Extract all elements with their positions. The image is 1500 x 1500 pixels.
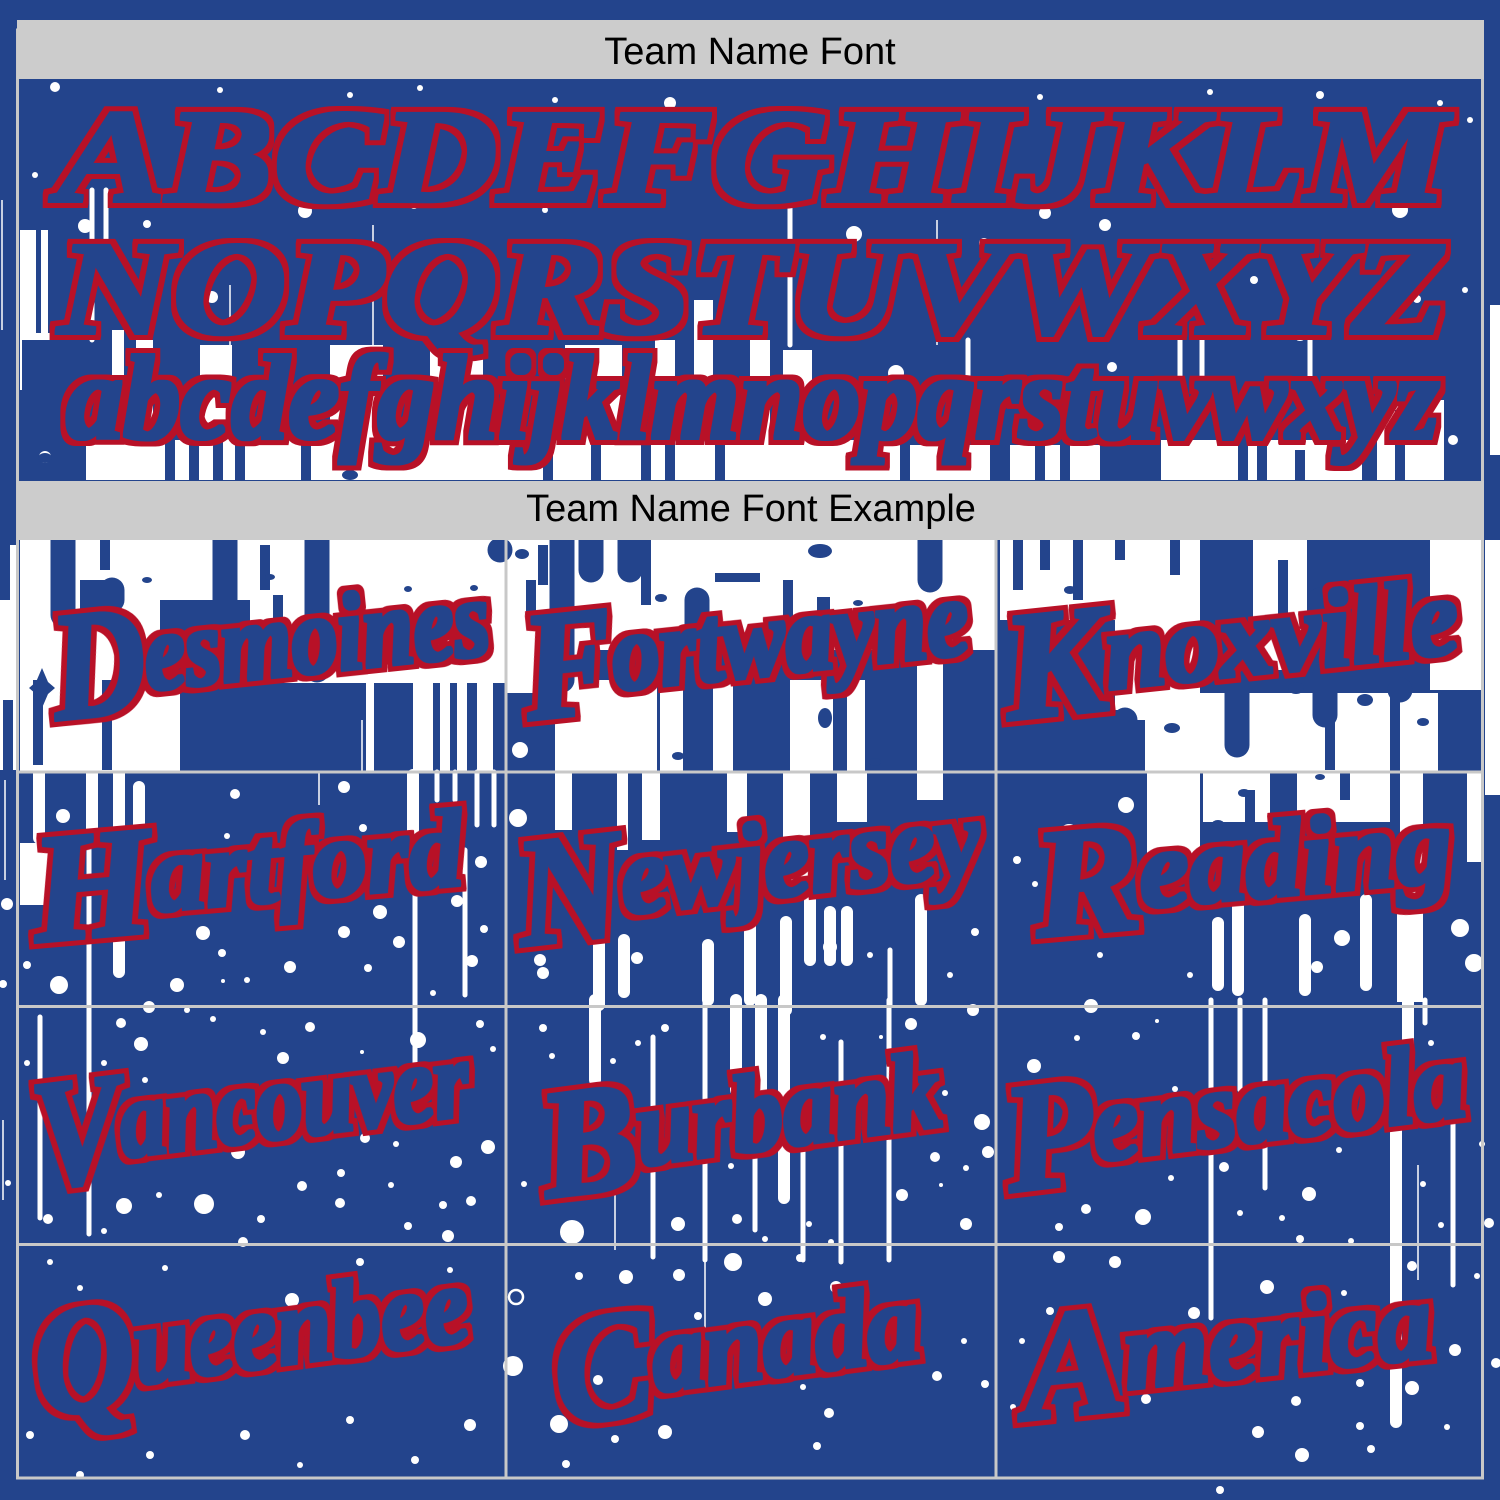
example grid of team names [23, 535, 1475, 1459]
heading bar: Team Name Font [17, 20, 1484, 79]
example: Vancouver: ancouver [112, 1017, 477, 1181]
example: Fortwayne: F [514, 573, 621, 754]
example: Burbank: urbank [627, 1028, 948, 1189]
example: Fortwayne: ortwayne [605, 556, 974, 715]
example: Pensacola: ensacola [1085, 1018, 1471, 1185]
example: Newjersey: ewjersey [613, 776, 988, 938]
example: Hartford: artford [145, 787, 469, 936]
alphabet specimen [50, 82, 1453, 464]
example: Canada: anada [643, 1260, 926, 1416]
example: America: A [1004, 1272, 1133, 1455]
example: Knoxville: noxville [1098, 555, 1464, 713]
example: Burbank: B [528, 1048, 647, 1232]
example: Queenbee: Q [23, 1267, 145, 1451]
example: Desmoines: esmoines [138, 557, 495, 714]
example: Pensacola: P [993, 1044, 1104, 1226]
example: Vancouver: V [24, 1039, 139, 1222]
example: Reading: eading [1133, 783, 1456, 932]
example: Newjersey: N [505, 796, 635, 980]
uppercase N to Z: NOPQRSTUVWXYZ [56, 214, 1448, 362]
heading bar: Team Name Font Example: Team Name Font Example [526, 488, 976, 530]
example: Desmoines: D [41, 573, 154, 754]
heading bar: Team Name Font: Team Name Font [604, 31, 896, 73]
example: America: merica [1117, 1259, 1437, 1413]
example: Reading: R [1025, 790, 1146, 971]
background: blue speckles on white paint [29, 453, 1429, 828]
example: Hartford: H [23, 794, 162, 976]
example: Queenbee: ueenbee [126, 1243, 475, 1408]
lowercase a to z: abcdefghijklmnopqrstuvwxyz [66, 331, 1439, 464]
example: Knoxville: K [993, 571, 1123, 754]
uppercase A to M: ABCDEFGHIJKLM [50, 82, 1453, 230]
heading bar: Team Name Font Example [17, 481, 1484, 540]
example: Canada: C [543, 1275, 665, 1459]
